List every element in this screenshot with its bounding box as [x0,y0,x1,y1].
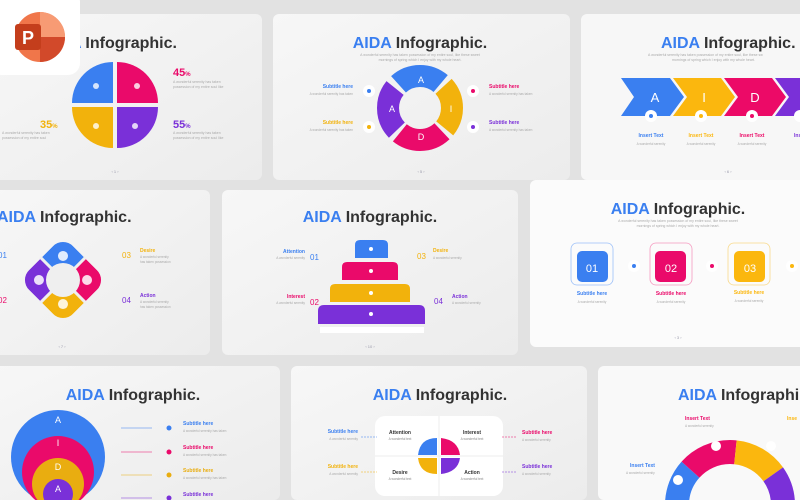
title: AIDA Infographic. [661,35,796,52]
stat 45%: A wonderful serenity has taken [173,80,221,84]
right subtitles: Subtitle here [489,84,520,90]
slide card: pie chart: ‹ 1 › [111,169,119,174]
insert text labels: A wonderful serenity [738,142,767,146]
labels: A wonderful serenity [140,300,169,304]
subtitle list: A wonderful serenity has taken [183,453,227,457]
powerpoint icon tile: P [22,28,34,48]
ring chart: D [418,132,425,142]
labels: A wonderful serenity [140,255,169,259]
insert text labels: A wonderful serenity [687,142,716,146]
step subtitles: Subtitle here [656,291,686,297]
quadrant panel: Interest [463,430,481,436]
title: A Infographic. [70,35,177,52]
title: AIDA Infographic. [373,387,507,404]
step subtitles: A wonderful serenity [578,300,607,304]
stat 45% [173,67,223,89]
left labels: 01 [310,253,319,262]
step boxes: 02 [665,263,677,275]
left labels [276,249,319,307]
ring chart [388,75,452,142]
right labels: A wonderful serenity [433,256,462,260]
subtitle list: Subtitle here [183,421,214,427]
ring chart: A [418,75,424,85]
slide card: arc [598,366,800,500]
slide card: ring: ‹ 5 › [417,169,425,174]
left subtitles: Subtitle here [323,120,353,126]
chevron row: I [702,90,706,105]
quadrant panel: A wonderful text [389,437,411,441]
slide card: pyramid: ‹ 10 › [365,344,375,349]
stat 55%: possession of my entire soul like [173,136,223,140]
slide card: numbered steps: A wonderful serenity has taken possession of my entire soul, like these sweet [618,219,738,223]
ring chart: I [450,104,452,114]
slide card: numbered steps: mornings of spring which I enjoy with my whole heart. [637,224,719,228]
labels: 04 [122,296,131,305]
title: AIDA Infographic. [303,209,437,226]
right subtitles: A wonderful serenity has taken [489,128,533,132]
step subtitles [577,290,764,304]
labels [0,248,171,309]
slide card: pie chart [0,14,262,180]
step boxes [571,243,798,285]
arc chart [673,441,783,500]
labels: Desire [140,248,156,254]
slide card: diamond ring: ‹ 7 › [58,344,66,349]
arc labels: A wonderful serenity [626,471,655,475]
right labels [417,248,481,306]
ring chart: A [389,104,395,114]
arc labels [626,416,797,475]
insert text labels: Insert Text [689,133,714,139]
right labels: A wonderful serenity [452,301,481,305]
title: AIDA Infographic. [66,387,200,404]
slide card: chevrons [581,14,800,180]
concentric circles: A [55,415,61,425]
labels: 03 [122,251,131,260]
right subtitles [467,84,533,133]
quadrant panel: Desire [392,470,408,476]
stat 55% [173,119,223,140]
side subtitles: A wonderful serenity [522,438,551,442]
title: AIDA Infographi [678,387,799,404]
concentric circles: D [55,462,62,472]
right subtitles: Subtitle here [489,120,520,126]
side subtitles: Subtitle here [328,464,358,470]
right labels: Action [452,294,468,300]
right labels: 03 [417,252,426,261]
slide card: numbered steps [530,180,800,347]
quadrant panel: A wonderful text [389,477,411,481]
arc labels: Inse [787,416,797,422]
left labels: A wonderful serenity [276,256,305,260]
step subtitles: Subtitle here [577,291,607,297]
left labels: 02 [310,298,319,307]
subtitle list: Subtitle here [183,468,214,474]
stat 35%: possession of my entire soul [2,136,46,140]
arc labels: Insert Text [630,463,655,469]
step subtitles: A wonderful serenity [735,299,764,303]
labels: has taken possession [140,305,171,309]
insert text labels: Insert Text [740,133,765,139]
side subtitles: A wonderful serenity [329,437,358,441]
slide card: chevrons: A wonderful serenity has taken possession of my entire soul, like these sw [648,53,763,57]
right labels: 04 [434,297,443,306]
title: AIDA Infographic. [353,35,487,52]
insert text labels: A wonderful serenity [637,142,666,146]
stat 35%: 35% [40,119,58,131]
left labels: Interest [287,294,305,300]
left labels: A wonderful serenity [276,301,305,305]
stat 35%: A wonderful serenity has taken [2,131,50,135]
step subtitles: A wonderful serenity [657,300,686,304]
stat 45%: possession of my entire soul like [173,85,223,89]
slide card: ring: mornings of spring which I enjoy with my whole heart. [379,58,461,62]
right labels: Desire [433,248,449,254]
left subtitles: A wonderful serenity has taken [310,92,353,96]
labels: has taken possession [140,260,171,264]
slide card: chevrons: ‹ 6 › [724,169,732,174]
arc labels: A wonderful serenity [685,424,714,428]
left labels: Attention [283,249,305,255]
slide card: ring: A wonderful serenity has taken possession of my entire soul, like these sweet [360,53,480,57]
slide card: quadrant box [291,366,587,500]
right subtitles: A wonderful serenity has taken [489,92,533,96]
concentric circles [11,410,105,500]
insert text labels: Insert Text [639,133,664,139]
slide card: concentric circles [0,366,280,500]
insert text labels [637,133,800,146]
slide card: numbered steps: ‹ 3 › [674,335,682,340]
side subtitles: A wonderful serenity [329,472,358,476]
stat 55%: 55% [173,119,191,131]
quadrant panel: A wonderful text [461,477,483,481]
left subtitles: Subtitle here [323,84,353,90]
subtitle list: A wonderful serenity has taken [183,476,227,480]
side subtitles: Subtitle here [522,464,553,470]
quadrant panel: Action [464,470,480,476]
slide card: diamond ring [0,190,210,355]
title: AIDA Infographic. [0,209,132,226]
stat 55%: A wonderful serenity has taken [173,131,221,135]
subtitle list: Subtitle here [183,492,214,498]
quadrant panel [375,416,503,496]
chevron row: D [750,90,760,105]
chevron row: A [651,90,660,105]
quadrant panel: A wonderful text [461,437,483,441]
subtitle list [121,421,227,500]
pyramid [318,240,425,333]
labels: Action [140,293,156,299]
left subtitles: A wonderful serenity has taken [310,128,353,132]
step subtitles: Subtitle here [734,290,764,296]
slide card: ring [273,14,570,180]
quadrant panel: Attention [389,430,411,436]
pie chart [72,62,158,148]
chevron row [621,78,800,122]
stat 45%: 45% [173,67,191,79]
step boxes: 01 [586,263,598,275]
side subtitles [328,429,553,476]
side subtitles: A wonderful serenity [522,472,551,476]
side subtitles: Subtitle here [522,430,553,436]
powerpoint icon tile [0,0,80,75]
subtitle list: A wonderful serenity has taken [183,429,227,433]
slide card: chevrons: mornings of spring which I enjoy with my whole heart. [672,58,755,62]
subtitle list: Subtitle here [183,445,214,451]
stat 35% [2,119,58,140]
step boxes: 03 [744,263,756,275]
side subtitles: Subtitle here [328,429,358,435]
slide card: pyramid [222,190,518,355]
title: AIDA Infographic. [611,201,745,218]
concentric circles: A [55,484,61,494]
concentric circles: I [57,438,59,448]
left subtitles [310,84,375,133]
diamond ring [24,242,101,318]
arc labels: Insert Text [685,416,710,422]
